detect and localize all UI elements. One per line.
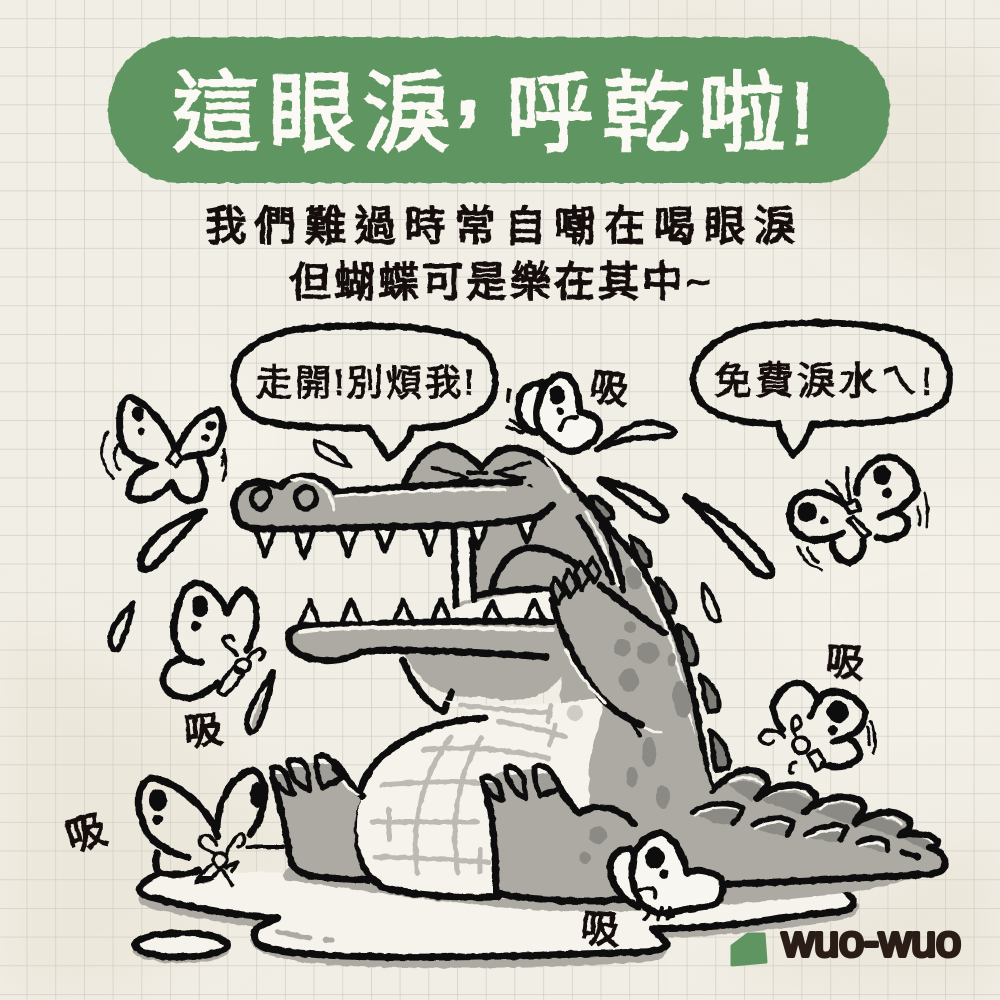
torso grey — [589, 720, 712, 830]
claws — [551, 558, 600, 604]
butterfly: bottom left — [139, 770, 283, 885]
bubble text: 走開!別煩我! — [256, 362, 474, 403]
illustration — [102, 323, 950, 968]
arm — [550, 570, 690, 725]
butterfly: top left — [102, 397, 226, 500]
subtitle — [205, 203, 795, 305]
sniff sound labels: 吸 — [824, 641, 865, 686]
sniff sound labels: 吸 — [587, 366, 631, 413]
speech bubble: free tears — [693, 323, 950, 455]
left foot — [272, 760, 365, 880]
subtitle: 但蝴蝶可是樂在其中~ — [290, 259, 710, 305]
logo wordmark: wuo-wuo — [781, 917, 961, 966]
sniff sound labels: 吸 — [182, 709, 224, 754]
dorsal plates — [590, 497, 729, 770]
crocodile — [234, 445, 945, 901]
head — [406, 445, 625, 620]
tail scale marks — [693, 804, 918, 857]
tear drops — [110, 423, 772, 732]
shadow under crocodile — [283, 860, 905, 912]
belly pattern — [372, 705, 565, 873]
right foot — [483, 768, 650, 900]
nostrils — [248, 484, 274, 512]
title banner — [108, 37, 890, 183]
closed eyes — [432, 462, 530, 485]
small puddle — [133, 933, 229, 963]
title text: 這眼淚 — [172, 64, 450, 163]
subtitle: 我們難過時常自嘲在喝眼淚 — [205, 203, 795, 249]
sniff sound labels: 吸 — [61, 807, 111, 860]
throat — [403, 650, 575, 700]
mouth interior — [473, 515, 612, 620]
body spots — [614, 564, 694, 809]
title text: 呼乾啦! — [506, 64, 814, 163]
upper jaw — [234, 476, 549, 529]
tongue — [456, 592, 560, 622]
sniff sound labels — [61, 366, 865, 953]
body and tail — [560, 490, 945, 895]
tail dark scallops — [693, 781, 934, 852]
logo icon — [732, 934, 766, 965]
speech bubble: go away — [234, 326, 495, 458]
bubble text: 免費淚水ㄟ! — [714, 361, 932, 403]
title text: , — [456, 38, 479, 132]
butterfly: bottom centre — [610, 833, 723, 920]
lower teeth — [299, 600, 547, 630]
sniff sound labels: 吸 — [579, 907, 621, 953]
butterfly: on head — [507, 375, 600, 452]
lower jaw — [288, 622, 572, 663]
butterfly: right — [790, 457, 928, 570]
butterfly: right lower — [760, 683, 875, 773]
puddle — [138, 872, 859, 968]
upper teeth — [254, 512, 538, 558]
cheek — [492, 548, 586, 588]
butterfly: left middle — [163, 583, 264, 698]
belly — [355, 696, 604, 899]
